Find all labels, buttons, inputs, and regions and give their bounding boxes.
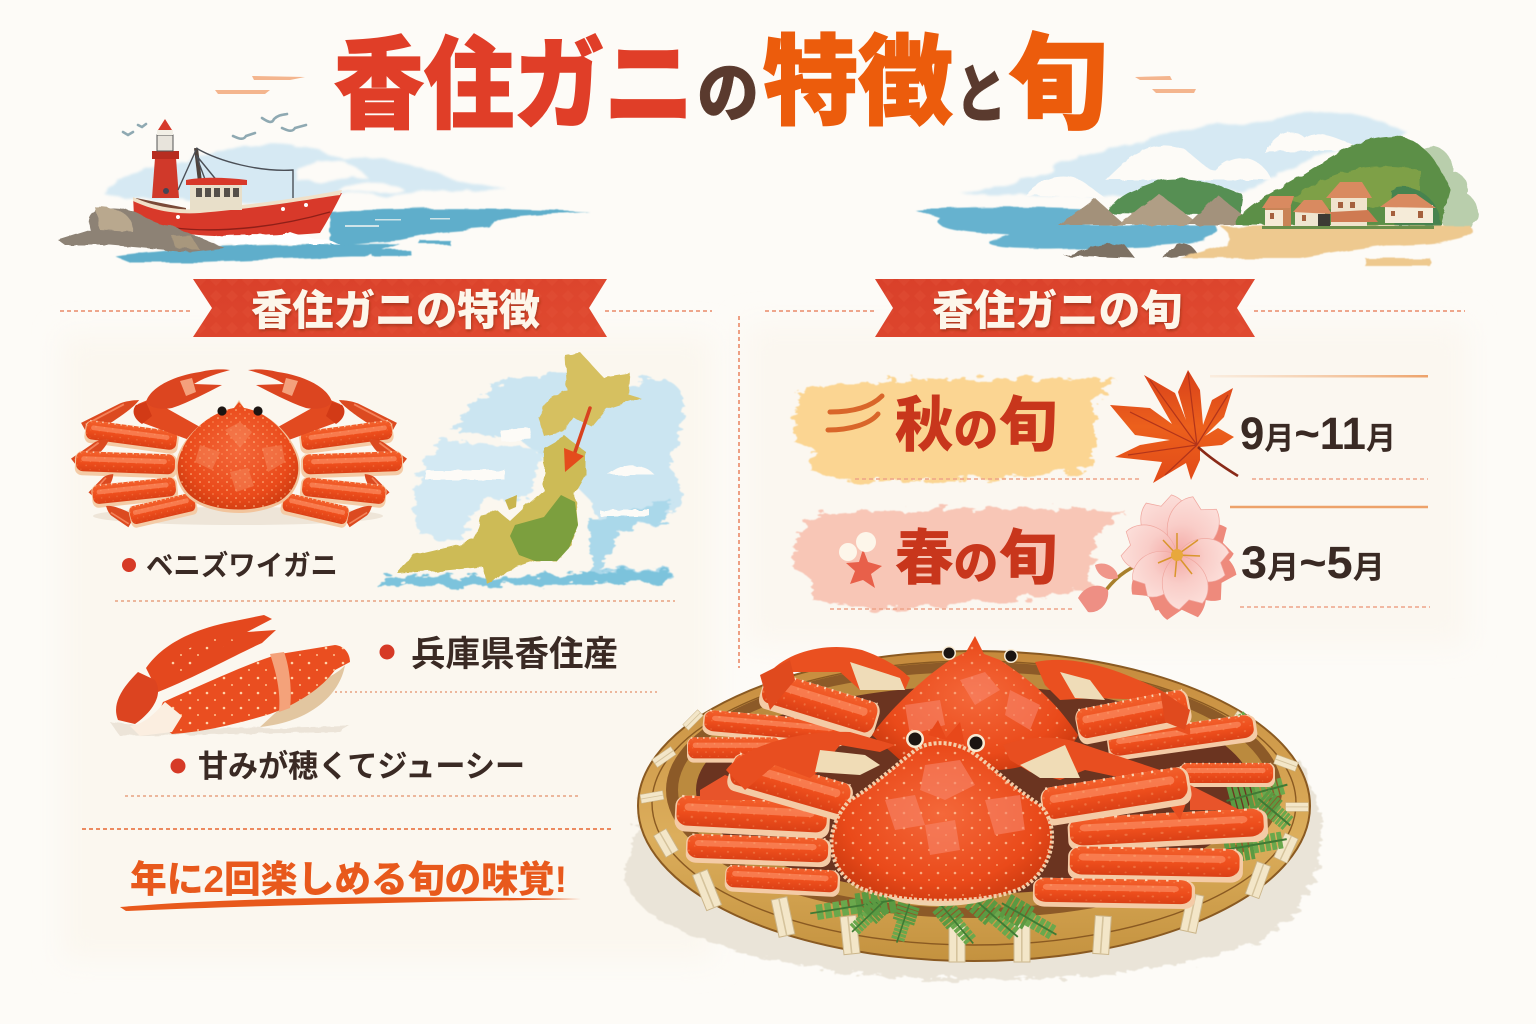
date: 9月〜11月: 9月~11月 [1240, 408, 1396, 459]
title: 特徴 [763, 27, 953, 137]
front crab claws [725, 732, 1193, 827]
banner: 香住ガニの旬 [875, 279, 1255, 337]
title: 香住ガニ [334, 30, 694, 142]
sea [115, 209, 590, 262]
autumn wind icon [828, 396, 882, 430]
rocks [58, 207, 225, 252]
label: 春の旬 [895, 525, 1057, 592]
rocks [1058, 193, 1255, 258]
sea wash [376, 374, 684, 586]
bamboo tray [638, 651, 1310, 962]
map: Japan with arrow [376, 352, 684, 586]
seagulls [123, 114, 306, 139]
beach [1180, 226, 1472, 266]
sea [914, 207, 1217, 249]
tray shadow wash [625, 760, 1321, 979]
title: と [955, 59, 1007, 131]
Sado island [505, 495, 517, 510]
panel: seasons [790, 370, 1430, 621]
illustration: lighthouse and fishing boat [58, 114, 590, 262]
clouds on map [425, 428, 655, 516]
item: 甘みが穂くてジューシー: 甘みが穂くてジューシー [198, 749, 525, 784]
houses [1262, 182, 1436, 229]
back crab claws [756, 647, 1193, 746]
upper claw [146, 615, 276, 692]
sky wash [962, 113, 1410, 195]
illustration: crabs on bamboo tray [625, 636, 1321, 979]
label: 秋の旬 [895, 392, 1057, 459]
brush stroke [790, 509, 1125, 610]
icon: cherry blossom [1078, 491, 1242, 621]
ferns [810, 715, 1290, 943]
green region [510, 495, 578, 561]
panel: features [71, 352, 684, 911]
icon: maple leaf [1110, 370, 1238, 483]
sakura icon [839, 532, 882, 588]
lighthouse [152, 119, 179, 198]
illustration: coastal village [914, 113, 1478, 266]
sky wash [102, 144, 510, 205]
decorative title streaks [215, 76, 1196, 94]
banner: 香住ガニの旬: 香住ガニの旬 [932, 287, 1182, 334]
brush stroke [792, 379, 1116, 482]
title: の [697, 56, 759, 130]
banner: 香住ガニの特徴 [193, 279, 607, 337]
Honshu [397, 436, 586, 584]
Hokkaido [538, 352, 641, 436]
boat [133, 148, 342, 237]
big claw [160, 645, 350, 734]
title: 旬 [1008, 27, 1107, 143]
illustration: red snow crab [71, 369, 407, 529]
front crab legs [674, 775, 1269, 909]
callout: 年に2回楽しめる旬の味覚！: 年に2回楽しめる旬の味覚! [130, 859, 567, 900]
illustration: crab claws [110, 615, 350, 736]
banner: 香住ガニの特徴: 香住ガニの特徴 [251, 287, 540, 334]
item: 兵庫県香住産: 兵庫県香住産 [411, 635, 618, 674]
wooded mountain [1236, 136, 1478, 232]
far hill [1108, 179, 1243, 215]
arrow [564, 408, 590, 472]
back crab legs [687, 709, 1275, 787]
white wave streaks [345, 218, 450, 227]
back crab shell [872, 636, 1078, 770]
left section divider lines [60, 311, 1465, 668]
foam [215, 232, 340, 244]
date: 3月〜5月: 3月~5月 [1241, 537, 1385, 588]
item: ベニズワイガニ: ベニズワイガニ [146, 549, 338, 581]
row: autumn season [792, 370, 1428, 483]
front crab shell [831, 720, 1052, 906]
clouds [1025, 132, 1365, 198]
row: spring season [790, 491, 1430, 621]
title [334, 27, 1107, 143]
